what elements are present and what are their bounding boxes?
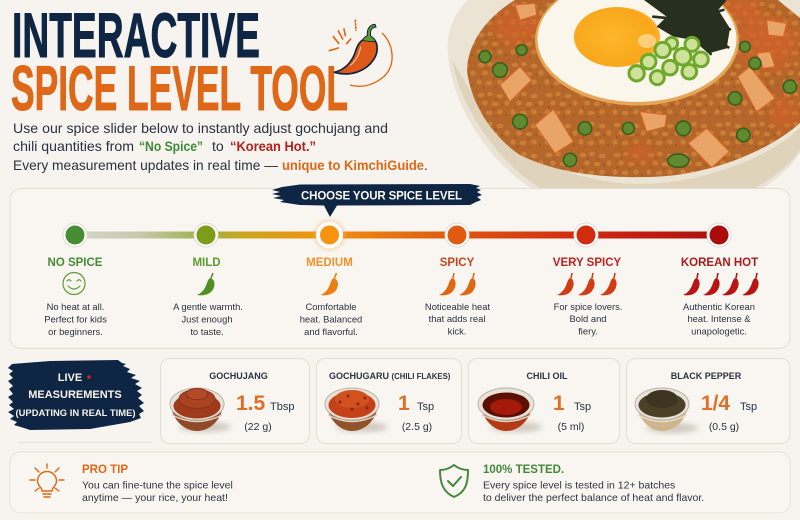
panel: tips [10, 452, 790, 513]
icon: smiley [63, 272, 85, 294]
level: mild: Just enough [181, 314, 233, 324]
icon: orange chili [320, 273, 338, 295]
level: no spice: No heat at all. [47, 301, 104, 312]
level: mild [173, 257, 243, 337]
level: no spice: NO SPICE [48, 257, 103, 269]
icon: four chilies [683, 273, 759, 295]
level: no spice [44, 257, 107, 337]
value: 1/4 Tsp (0.5 g): 1/4 [701, 392, 730, 415]
level: spicy: Noticeable heat [425, 301, 490, 312]
card: black pepper [626, 358, 790, 444]
slider stop: medium (selected) [314, 220, 344, 250]
slider stop: very spicy [574, 223, 598, 247]
photo: kimchi fried rice bowl with egg [448, 0, 800, 190]
level: no spice: or beginners. [48, 326, 103, 337]
title [11, 1, 348, 124]
intro text: “No Spice” [139, 138, 203, 154]
level: medium [300, 257, 362, 337]
icon: bowl of black pepper [635, 388, 698, 433]
icon: title chili pepper [329, 20, 392, 86]
slider stop: korean hot [707, 223, 731, 247]
text: 100% tested: 100% TESTED. [483, 464, 564, 476]
value: 1/4 Tsp (0.5 g) [701, 392, 757, 433]
intro text: . [424, 157, 428, 173]
level: very spicy: For spice lovers. [554, 301, 622, 312]
level: korean hot [681, 257, 759, 336]
slider stop: mild [194, 223, 218, 247]
intro text: “Korean Hot.” [230, 138, 316, 154]
panel: spice level slider [10, 184, 790, 348]
label: live measurements: (UPDATING IN REAL TIME) [16, 408, 136, 419]
title: SPICE LEVEL TOOL [11, 54, 348, 124]
level: spicy: that adds real [429, 313, 485, 324]
level: mild: A gentle warmth. [173, 301, 243, 312]
text: pro tip: You can fine-tune the spice level [82, 480, 233, 492]
level: mild: MILD [192, 257, 221, 269]
text: 100% tested: to deliver the perfect balance of heat and flavor. [483, 492, 704, 504]
level: korean hot: heat. Intense & [687, 313, 751, 324]
value: 1 Tsp (2.5 g) [398, 392, 434, 433]
card: chili oil [468, 358, 620, 444]
level: korean hot: KOREAN HOT [681, 257, 758, 269]
fried egg [535, 0, 739, 106]
icon: green chili [197, 273, 214, 295]
value: 1 Tsp (2.5 g): 1 [398, 392, 410, 415]
level: spicy: SPICY [440, 257, 475, 269]
intro text: Use our spice slider below to instantly adjust gochujang and [13, 120, 388, 136]
text: 100% tested [483, 464, 704, 504]
icon: two chilies [439, 273, 476, 295]
intro text: chili quantities from [13, 138, 134, 154]
intro text: Every measurement updates in real time — [13, 157, 278, 173]
level: medium: heat. Balanced [300, 314, 362, 324]
icon: bowl of chili flakes [325, 388, 388, 432]
label: live measurements [8, 360, 144, 430]
icon: light bulb [30, 464, 64, 497]
value: 1/4 Tsp (0.5 g): Tsp [740, 401, 757, 413]
level: medium: and flavorful. [304, 326, 358, 337]
level: no spice: Perfect for kids [44, 314, 107, 324]
text: pro tip: PRO TIP [82, 464, 128, 476]
intro text: to [212, 138, 224, 154]
level: korean hot: Authentic Korean [683, 301, 755, 312]
level: spicy: kick. [448, 326, 466, 336]
title: INTERACTIVE [12, 1, 260, 71]
value: 1.5 Tbsp (22 g) [236, 392, 294, 433]
level: korean hot: unapologetic. [691, 326, 747, 336]
card: gochujang [160, 358, 310, 444]
card: black pepper: BLACK PEPPER [671, 371, 742, 381]
level: very spicy [553, 257, 622, 336]
label: live measurements: MEASUREMENTS [28, 389, 122, 401]
level: very spicy: Bold and [569, 313, 607, 324]
value: 1.5 Tbsp (22 g): 1.5 [236, 392, 266, 415]
card: gochugaru [316, 358, 462, 444]
card: gochujang: GOCHUJANG [209, 371, 268, 381]
toppings: nori and scallions [629, 0, 730, 85]
level: mild: to taste. [190, 326, 224, 337]
value: 1/4 Tsp (0.5 g): (0.5 g) [709, 421, 739, 433]
icon: three chilies [557, 273, 617, 295]
card: gochugaru: GOCHUGARU (CHILI FLAKES) [329, 371, 451, 381]
level: medium: Comfortable [305, 301, 357, 312]
value: 1.5 Tbsp (22 g): Tbsp [270, 401, 294, 413]
value: 1 Tsp (5 ml): (5 ml) [558, 421, 584, 433]
text: 100% tested: Every spice level is tested in 12+ batches [483, 480, 675, 492]
slider stop: spicy [445, 223, 469, 247]
text: pro tip [82, 464, 233, 504]
card: chili oil: CHILI OIL [526, 371, 568, 381]
slider stop: no spice [63, 223, 87, 247]
label: live measurements: LIVE [58, 372, 82, 384]
level: very spicy: fiery. [578, 326, 598, 336]
text: pro tip: anytime — your rice, your heat! [82, 492, 228, 504]
level: very spicy: VERY SPICY [553, 257, 622, 269]
level: spicy [425, 257, 490, 336]
level: medium: MEDIUM [306, 257, 353, 269]
value: 1 Tsp (5 ml) [553, 392, 591, 433]
icon: bowl of chili oil [478, 388, 542, 432]
value: 1.5 Tbsp (22 g): (22 g) [244, 421, 272, 433]
value: 1 Tsp (2.5 g): Tsp [417, 401, 434, 413]
intro text [13, 120, 428, 173]
icon: bowl of gochujang [170, 388, 231, 432]
value: 1 Tsp (5 ml): 1 [553, 392, 565, 415]
value: 1 Tsp (5 ml): Tsp [574, 401, 591, 413]
icon: shield check [440, 465, 468, 497]
value: 1 Tsp (2.5 g): (2.5 g) [402, 421, 432, 433]
intro text: unique to KimchiGuide [282, 157, 424, 173]
banner: choose your spice level [272, 184, 482, 217]
slider track [80, 232, 715, 238]
banner: choose your spice level: CHOOSE YOUR SPICE LEVEL [301, 190, 462, 202]
